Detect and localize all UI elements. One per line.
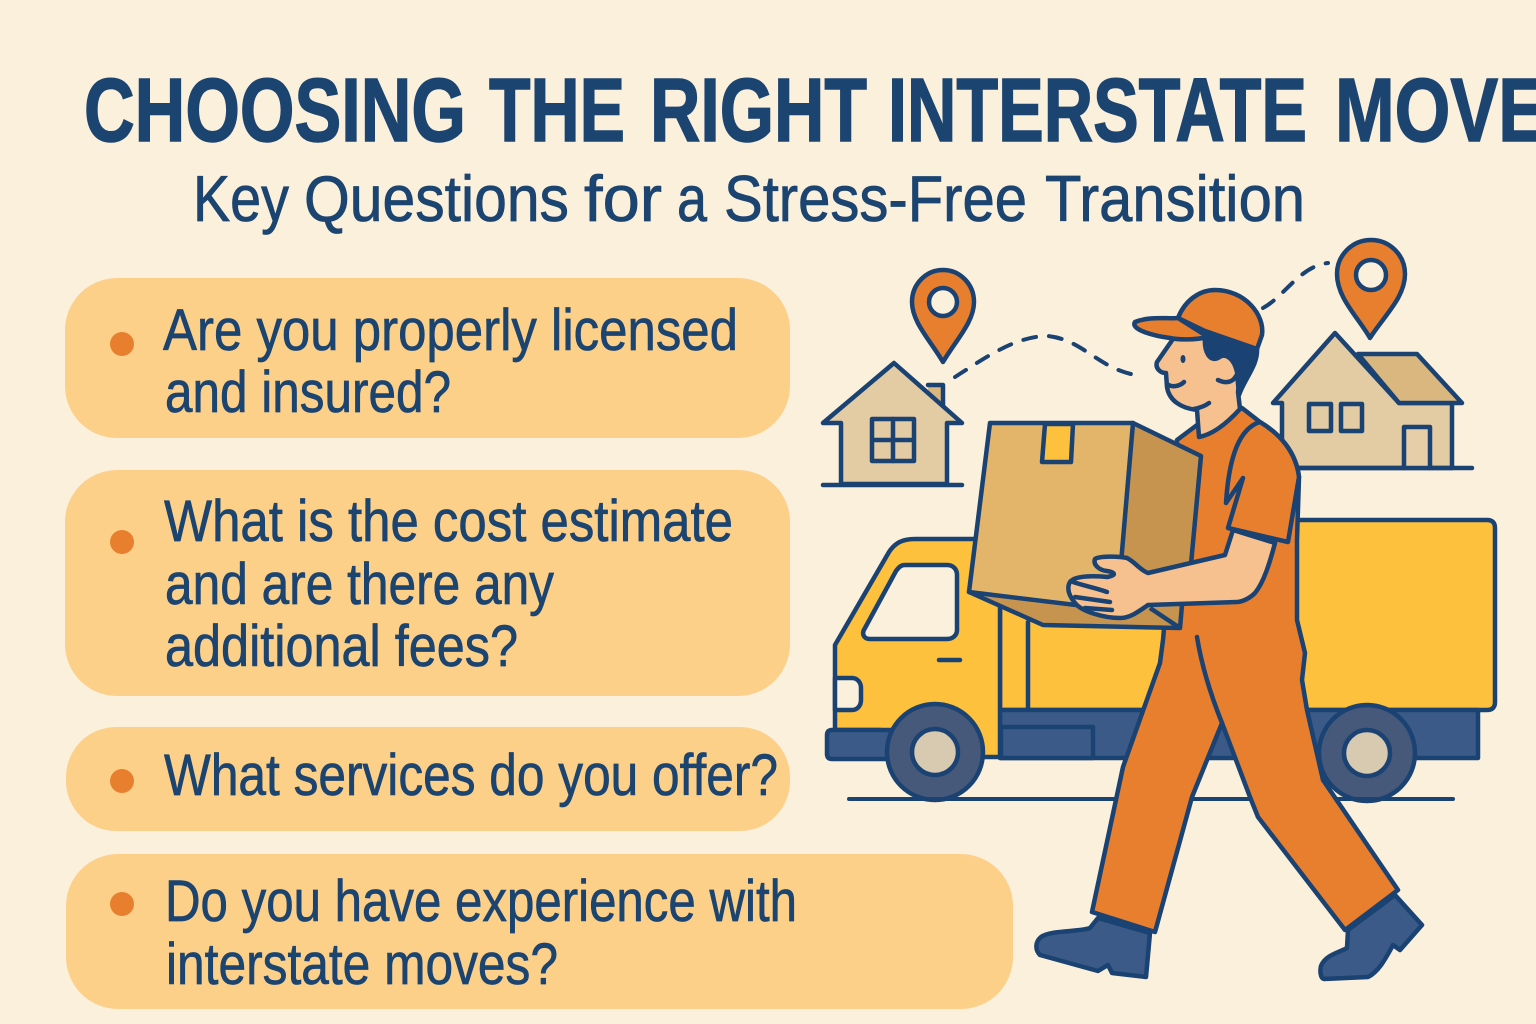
truck cargo body — [1000, 520, 1495, 710]
subtitle: Key — [193, 162, 289, 235]
title: INTERSTATE — [888, 61, 1307, 161]
front wheel — [887, 704, 983, 800]
cardboard box — [969, 423, 1201, 628]
ear and smile — [1167, 376, 1236, 409]
panel: question cost estimate: additional fees? — [165, 614, 518, 679]
box tape — [1042, 424, 1073, 462]
panel: question experience: Do you have experience with — [165, 869, 797, 934]
truck bumper — [827, 730, 892, 759]
truck chassis — [1000, 710, 1478, 758]
panel: question licensed and insured: Are you properly licensed — [163, 298, 738, 363]
eye — [1180, 355, 1186, 363]
truck window — [863, 565, 957, 639]
title: THE — [489, 61, 625, 161]
panel: question experience: interstate moves? — [166, 932, 558, 997]
truck door detail — [939, 622, 1028, 708]
box bottom flap — [969, 590, 1182, 628]
sleeve — [1226, 422, 1299, 542]
title — [84, 61, 1536, 161]
hair — [1205, 338, 1257, 395]
trousers and torso — [1092, 408, 1398, 932]
cap brim — [1134, 318, 1208, 339]
panel: question cost estimate: and are there any — [165, 552, 554, 617]
box side — [1115, 423, 1201, 590]
truck cab — [835, 539, 1000, 757]
panel: question cost estimate — [65, 470, 790, 696]
dashed route — [955, 263, 1328, 377]
box front — [969, 423, 1133, 610]
mover — [1036, 290, 1422, 979]
subtitle: Transition — [1045, 162, 1305, 235]
trouser crease — [1197, 637, 1222, 723]
icon: right house — [1273, 333, 1472, 468]
subtitle: Stress-Free — [724, 162, 1027, 235]
title: RIGHT — [650, 61, 867, 161]
ground line — [849, 797, 1453, 801]
truck — [827, 520, 1495, 801]
arm and hand — [1068, 530, 1275, 618]
panel: question cost estimate: What is the cost estimate — [164, 489, 733, 554]
cap — [1178, 290, 1262, 349]
panel: question services: What services do you offer? — [164, 743, 778, 808]
neck and face — [1157, 335, 1245, 437]
left boot — [1036, 918, 1150, 977]
panel: question licensed and insured — [65, 278, 790, 438]
panel: question experience — [66, 854, 1013, 1009]
panel: question services — [66, 727, 790, 831]
subtitle — [193, 162, 1305, 235]
subtitle: for — [584, 162, 662, 235]
truck headlight — [835, 678, 861, 710]
rear wheel — [1319, 705, 1415, 801]
subtitle: Questions — [304, 162, 569, 235]
subtitle: a — [677, 162, 708, 235]
icon: right location pin — [1337, 240, 1405, 338]
icon: left location pin — [912, 270, 974, 362]
icon: left house — [823, 363, 962, 485]
title: CHOOSING — [84, 61, 466, 161]
right boot — [1320, 895, 1422, 979]
panel: question licensed and insured: and insured? — [165, 360, 451, 425]
